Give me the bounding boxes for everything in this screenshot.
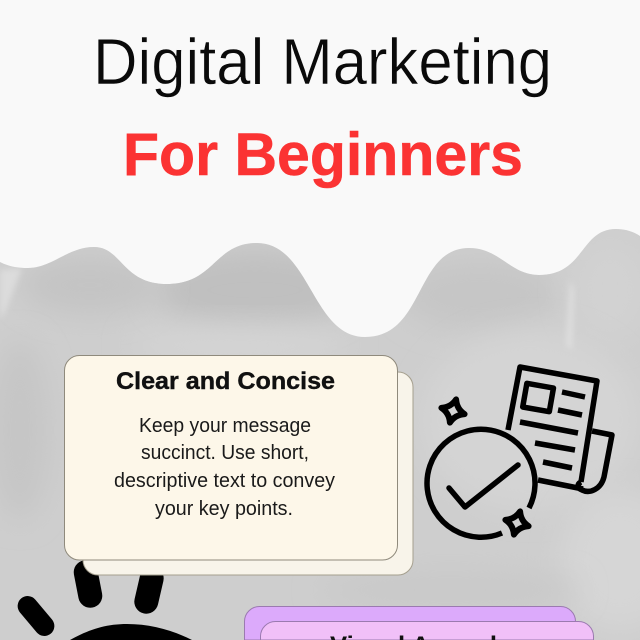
circle with gap (427, 429, 535, 537)
card back layer (83, 372, 413, 575)
icon: sun rays and disc (14, 558, 192, 640)
sparkle top (438, 396, 468, 426)
card body text: descriptive text to convey (114, 470, 335, 492)
title: For Beginners: For Beginners (123, 121, 523, 188)
background: grey textured wave (0, 220, 640, 640)
icon: newspaper with check mark (427, 367, 612, 538)
card front layer (64, 356, 398, 560)
title: Digital Marketing: Digital Marketing (93, 25, 552, 98)
card body text: Keep your message (139, 415, 311, 437)
card body text (114, 415, 335, 520)
panel: visual appeal (244, 606, 594, 640)
check mark (449, 465, 518, 507)
card body text: your key points. (155, 498, 293, 520)
sparkle bottom (502, 508, 532, 538)
card heading: Clear and Concise (116, 368, 335, 395)
purple front layer (260, 622, 594, 640)
panel: clear and concise (64, 356, 413, 575)
newspaper (508, 367, 597, 489)
card body text: succinct. Use short, (141, 442, 309, 464)
purple back layer (244, 606, 576, 640)
